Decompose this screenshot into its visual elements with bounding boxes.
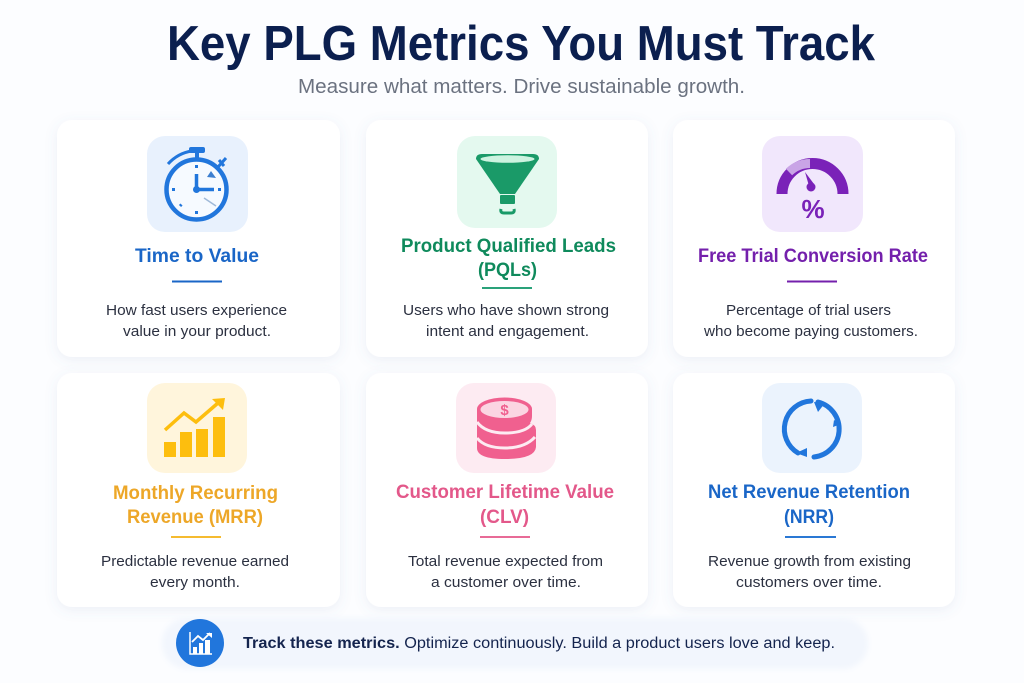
icon: coin stack bbox=[456, 383, 556, 473]
icon: growth bars bbox=[147, 383, 247, 473]
callout text: Track these metrics. Optimize continuously. Build a product users love and keep. bbox=[243, 635, 835, 652]
description: Percentage of trial users bbox=[726, 302, 891, 319]
heading bbox=[401, 236, 616, 281]
description bbox=[408, 553, 603, 591]
panel: Free Trial Conversion Rate bbox=[673, 120, 955, 357]
description: Predictable revenue earned bbox=[101, 553, 289, 570]
description: How fast users experience bbox=[106, 302, 287, 319]
icon: funnel bbox=[457, 136, 557, 228]
icon: gauge: % bbox=[801, 194, 825, 224]
description bbox=[708, 553, 911, 591]
divider bbox=[171, 536, 221, 538]
description: Total revenue expected from bbox=[408, 553, 603, 570]
description bbox=[101, 553, 289, 591]
heading: Customer Lifetime Value bbox=[396, 482, 614, 503]
title: Key PLG Metrics You Must Track bbox=[167, 17, 876, 71]
description: value in your product. bbox=[123, 323, 271, 340]
description: who become paying customers. bbox=[703, 323, 918, 340]
divider bbox=[785, 536, 836, 538]
divider bbox=[172, 280, 222, 282]
panel: Time to Value bbox=[57, 120, 340, 357]
description bbox=[106, 302, 287, 340]
divider bbox=[787, 280, 837, 282]
panel: Monthly Recurring Revenue bbox=[57, 373, 340, 607]
description bbox=[403, 302, 609, 340]
panel: Customer Lifetime Value bbox=[366, 373, 648, 607]
heading: Time to Value bbox=[135, 246, 259, 267]
icon: chart badge bbox=[176, 619, 224, 667]
description: every month. bbox=[150, 574, 240, 591]
heading: (NRR) bbox=[784, 507, 834, 528]
heading: (CLV) bbox=[480, 507, 529, 528]
subtitle: Measure what matters. Drive sustainable growth. bbox=[298, 76, 745, 98]
description bbox=[703, 302, 918, 340]
panel: Product Qualified Leads bbox=[366, 120, 648, 357]
heading: Free Trial Conversion Rate bbox=[698, 246, 928, 267]
description: intent and engagement. bbox=[426, 323, 589, 340]
heading: (PQLs) bbox=[478, 260, 537, 281]
heading: Product Qualified Leads bbox=[401, 236, 616, 257]
icon: gauge bbox=[762, 136, 863, 232]
heading bbox=[113, 483, 278, 528]
description: a customer over time. bbox=[431, 574, 581, 591]
divider bbox=[482, 287, 532, 289]
icon: stopwatch bbox=[147, 136, 248, 232]
heading bbox=[708, 482, 910, 528]
description: Users who have shown strong bbox=[403, 302, 609, 319]
callout bar bbox=[162, 618, 868, 669]
icon: cycle arrows bbox=[762, 383, 862, 473]
divider bbox=[480, 536, 530, 538]
heading: Monthly Recurring bbox=[113, 483, 278, 504]
heading: Revenue (MRR) bbox=[127, 507, 263, 528]
description: Revenue growth from existing bbox=[708, 553, 911, 570]
icon: coin stack: $ bbox=[500, 402, 509, 419]
panel: Net Revenue Retention bbox=[673, 373, 955, 607]
heading bbox=[396, 482, 614, 528]
description: customers over time. bbox=[736, 574, 882, 591]
heading: Net Revenue Retention bbox=[708, 482, 910, 503]
